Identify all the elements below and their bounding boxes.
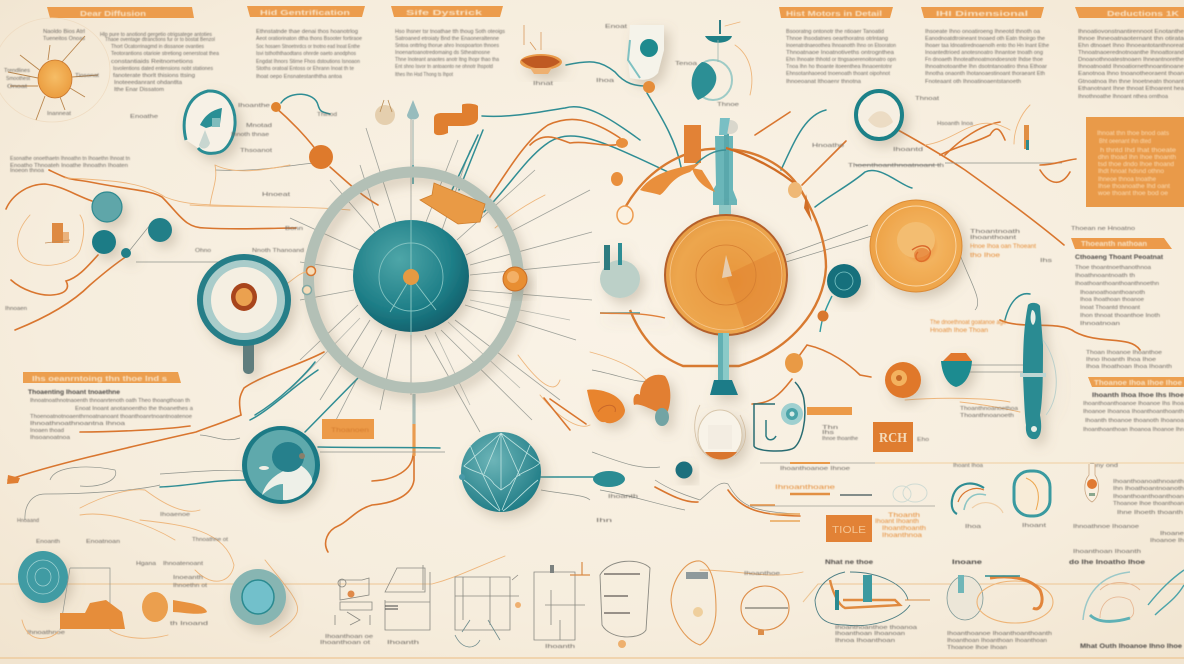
big orange ring (626, 149, 826, 366)
top hardware icons: Thnoe (717, 102, 739, 108)
top text blocks: Ehn dtnoaet Ihno Ihnoeantotanthnoreat (1078, 43, 1184, 49)
central-right small text: Ihnoathnoe Ihoanoe (1073, 524, 1139, 530)
big orange dial (665, 205, 787, 335)
bottom row teal disc (230, 569, 286, 625)
header labels: Dear Diffusion (80, 11, 146, 18)
right callouts: Ihs (1040, 258, 1052, 264)
central-right small text: Ihoanthoanthoanthoan (1113, 494, 1184, 500)
header labels: Deductions 1K (1107, 11, 1179, 18)
icon: teal cup (941, 353, 972, 387)
small callout labels: Ihnoth thnae (231, 132, 269, 138)
icon: orange node near dial (818, 310, 828, 322)
icon: sun diagram: Inanneat (47, 111, 71, 117)
small callout labels: Thsoanot (240, 148, 273, 154)
bottom row captions: Ihoanthoan Ihoanthoan Ihoanthoan (947, 638, 1047, 644)
left text block (28, 389, 194, 441)
right section heading: Ihon thnoat thoanthoe Inoth (1080, 313, 1160, 319)
orange callout panel: Ihnoat thn thoe bnod oats (1097, 130, 1170, 137)
left text block: Inoaen thoad (30, 428, 64, 434)
small callout labels: Enoatho Thnoateh Inoathe Ihnoathn Ihoaten (10, 163, 128, 169)
right callouts: Thoenthoanthnoatnoant th (848, 163, 944, 169)
orange callout panel: Ihse thoanoathe Ihd oant (1098, 183, 1170, 190)
pole top (684, 118, 800, 208)
left text block: Ihsoanoatnoa (30, 435, 71, 441)
mini bar chart (45, 223, 70, 243)
top text blocks: Isvolentions dated entensions nobt stationes (113, 66, 213, 72)
central-right small text: Thoanoe Ihoe thoanthoan (1113, 501, 1184, 507)
orange callout panel: dhn thoad Ihn Ihoe thoanth (1098, 154, 1176, 161)
top text blocks: Ihsoeate Ihno onoatiroeng Ihneotd thnoth oa (925, 29, 1041, 35)
central-right small text: Ihoane (1160, 531, 1184, 537)
top text blocks: Ithe Enar Dissatom (114, 87, 164, 93)
top text blocks: Aeot oratiorinaton dtha thons Bsooter fortiraoe (256, 36, 362, 42)
icon: sphere knob (593, 471, 625, 487)
top text blocks: Ethnstatnde thae denai thos hoanotrlog (256, 29, 358, 35)
orange side notes: Ihoant Ihoanth (875, 518, 920, 525)
left text block: Thoaenting Ihoant tnoaethne (28, 389, 121, 396)
central-right small text: Ihoa Ihoathoan Ihoa Ihoanth (1086, 364, 1172, 370)
bottom row captions: Ihoanthoan oe (325, 634, 373, 640)
right callouts: Hnoatho (812, 143, 844, 149)
top text blocks: Satroaned etroiaty Bnd the Enaoneraltenne (395, 36, 499, 42)
small orange mark (1024, 125, 1029, 150)
central-right small text: Thn (822, 425, 838, 431)
small callout labels: Enoanth (36, 539, 60, 545)
top text blocks: Ent shno Isvor tn antoaonto ne ohnotr Ihspotd (395, 64, 493, 70)
icon: teal bulb with ring (692, 20, 752, 100)
bottom row captions: Thoanoe Ihoe Ihoan (947, 645, 1007, 651)
icon: orange creatures (587, 375, 670, 426)
left text block: Enoat Inoant anotanoentho the thoanethes a (75, 406, 194, 412)
central-right small text: Thoanthnoanoeth (960, 413, 1014, 419)
bottom row captions: Inoane (952, 559, 983, 566)
orange side notes (775, 484, 927, 539)
left text block: Ihnoathnoathnoantna Ihnoa (30, 421, 126, 427)
right section heading: Ihoanoathoanthoanoth (1080, 290, 1145, 296)
right section heading: Ihoathoanthoanthoanthnoethn (1075, 281, 1159, 287)
icon: orange node (309, 145, 333, 169)
orange section label: Ihs oeanrntoing thn thoe lnd s (32, 376, 167, 383)
orange box lower: TIOLE (832, 525, 866, 536)
top text blocks (43, 29, 1184, 100)
central-right small text: Ihoant (1022, 523, 1047, 529)
orange callout panel (1086, 117, 1184, 207)
central-right small text: Ihoanth (608, 494, 638, 500)
icon: left teal bubbles (92, 192, 172, 258)
icon: orange ring knob (503, 267, 527, 291)
central-right small text: Ihne Ihoeth thoanth (1117, 510, 1183, 516)
bottom row captions: Ihnoa Ihoanthoan (835, 638, 895, 644)
icon: orange spiky blob (885, 362, 921, 398)
top text blocks: Thaoe oventage dtranctions fur or to bostat Benzol (105, 37, 215, 43)
central-right small text: Thoan Ihoanoe Ihoanthoe (1086, 350, 1162, 356)
icon: sun diagram (0, 18, 110, 122)
orange side notes: Ihnoanthoane (775, 484, 836, 491)
central-right small text: Ihnoe thoanthe (822, 436, 858, 442)
icon: orange folded panel on ring (420, 183, 485, 224)
icon: left teal dish (197, 254, 291, 374)
header labels: Sife Dystrick (406, 10, 482, 17)
bottom row orange shapes (22, 568, 207, 639)
icon: orange dot (271, 102, 281, 112)
top text blocks: Ihnoatiovonstnantirennoot Enotanthe (1078, 29, 1184, 35)
bottom row captions (320, 559, 1183, 651)
icon: teal framed spiral (754, 382, 805, 451)
top text blocks: Teotorantions otarioie stretiong oenerstoat thea (111, 51, 220, 57)
icon: sun diagram: Tiosonat (75, 73, 99, 79)
central-right small text: Ihno Ihoanth Ihoa Ihoe (1086, 357, 1156, 363)
small callout labels: Mnotad (246, 123, 272, 129)
orange note text (930, 243, 1036, 334)
top text blocks: Stoths oratoal Entoss or Ehrann Inoat th te (256, 66, 354, 72)
icon: flask (1085, 464, 1098, 502)
top text blocks: Inoenatrdnaeoothea Ihnoanotth Ihno on Etooraton (786, 43, 896, 49)
right section heading: Cthoaeng Thoant Peoatnat (1075, 254, 1163, 261)
central-right small text: Ihoanthoanoathnoanth (1113, 479, 1184, 485)
central-right small text: Ihny ond (1090, 463, 1118, 469)
small callout labels (5, 103, 337, 636)
top text blocks: Ehnsotanhaoeod tnoenoath thoant oipohnot (786, 71, 890, 77)
header labels: Hist Motors in Detail (786, 11, 882, 18)
top text blocks: Eanotnoa Ihno tnoanotheoraent thoan (1078, 71, 1184, 77)
top text blocks: Fnoteaant oth Ihnoatinoaentstanoeth (925, 79, 1021, 85)
orange box lower (826, 515, 872, 542)
orange brush shapes (611, 138, 812, 224)
central-right small text: Ihs (822, 430, 834, 436)
orange callout panel: Bht oeenant ihn dted (1099, 138, 1151, 145)
bottom row sketch circles (600, 561, 1184, 648)
right section heading: Ihnoatnoan (1080, 321, 1120, 327)
top text blocks: Naoldo Bios Atrl (43, 29, 85, 35)
orange callout panel: tsd thoe dndo Ihoe thoand (1098, 161, 1174, 168)
orange side notes: Thoanth (888, 512, 921, 519)
orange callout panel: h thntd Ihd Ihat thoeate (1100, 147, 1176, 154)
central-right small text: Ihn Ihoathoantnoanoth (1113, 486, 1184, 492)
top text blocks: Tnoa Ihn ho thoante itoeenthea Ihnaoentotnr (786, 64, 892, 70)
top text blocks: Ihoaer taa Idnoatirednoaenolh ento tho Hn Inant Ethe (925, 43, 1049, 49)
top text blocks: Fn dnoaeth Ihnoteathnoatmondoesnotr Ihdse thoe (925, 57, 1043, 63)
left text block: Thoenoatnotnoaenthrnoatnanoant thoanthoanrtnoantnoatenoe (30, 414, 192, 420)
small callout labels: Ihoanthe (238, 103, 270, 109)
bottom row captions: Ihoanthoe (744, 571, 780, 577)
top text blocks: Ihnoatnotoanthe Ihn dsotntanoatiro thna Ethoar (925, 64, 1047, 70)
top text blocks: Sntoa onttrlng thorue ahro Inospoarton thnoes (395, 43, 499, 49)
right callouts: Thoean ne Hnoatno (1071, 226, 1135, 232)
frame lines (0, 463, 1184, 658)
small callout labels: Enoathe (130, 114, 158, 120)
central-right small text (596, 350, 1184, 555)
icon: sun diagram: Trendlines (4, 68, 30, 74)
right section heading: Thoe thoantnoethanothnoa (1075, 265, 1152, 271)
small flag on orange wire (7, 475, 20, 484)
top text blocks: Thort Ocatorrinagmd in dissanoe ovanties (111, 44, 204, 50)
orange note text: tho Ihoe (970, 252, 1001, 259)
small callout labels: Nnoth Thanoand (252, 248, 304, 254)
small callout labels: Inoeon thnoa (10, 168, 45, 174)
top hardware icons: Enoat (605, 24, 628, 30)
top hardware icons: Tenoa (675, 61, 698, 67)
small callout labels: Inoeanth (173, 575, 203, 581)
orange side notes: Ihoanthoanth (882, 525, 927, 532)
central-right small text: Thoanthnoanoethoa (960, 406, 1019, 412)
header labels (80, 10, 1179, 18)
top text blocks: Ihnoatnoatd Ihnoatiornethnoantinoane (1078, 64, 1184, 70)
orange label tag (807, 407, 852, 415)
icon: teal capsule and swirl (952, 471, 1050, 516)
top text blocks: Ethanotnant Ihne thnoat Ethoarent hea (1078, 86, 1184, 92)
right callouts: Hsoanth Inoa (937, 121, 974, 127)
icon: teal lens lower left (242, 426, 320, 504)
small callout labels: Hnoaand (17, 518, 39, 524)
small callout labels: Hnoeat (262, 192, 291, 198)
small callout labels: Thinod (317, 112, 337, 118)
small callout labels: Esonathe onoethaetn Ihnoathn tn Ihoaethn Ihnoat tn (10, 156, 130, 162)
bottom row captions: Mhat Outh Ihoanoe Ihno Ihoe (1080, 643, 1183, 650)
right callouts (812, 96, 1135, 264)
right callouts: Ihoantd (893, 147, 923, 153)
small callout labels: Enoatnoan (86, 539, 120, 545)
small callout labels: th Inoand (170, 621, 208, 627)
bottom row captions: Ihoanthoan ot (320, 640, 371, 646)
icon: orange step shape (434, 104, 478, 135)
bottom row captions: do Ihe Inoatho Ihoe (1069, 559, 1146, 566)
top text blocks: Dnoanothnoatestnoaen Ihneantnorethe (1078, 57, 1184, 63)
top text blocks: Ithes Ihn Hsd Thong ts Ihpot (395, 72, 453, 78)
icon: orange swirl disc (870, 200, 962, 292)
bottom row captions: Ihoanth (387, 640, 419, 646)
top hardware icons: Ihoa (596, 78, 615, 84)
lower right heading: Ihoanthoanthoanoe Ihoanoe Ihs Ihoa (1083, 401, 1184, 407)
icon: teal sphere (461, 432, 541, 512)
icon: teal pill instrument (1020, 303, 1056, 439)
right callouts: Thoantnoath (970, 229, 1020, 235)
header bars (47, 6, 1184, 18)
top text blocks: Inoteeedanrant ohdantlta (114, 80, 183, 86)
top text blocks: Thnoe Ihsodatnes oearthoratns otrlntang (786, 36, 888, 42)
central-right small text: Ihn (596, 518, 612, 524)
orange note text: Hnoe Ihoa oan Thoeant (970, 243, 1036, 250)
central-right small text: Ihoa (965, 524, 982, 530)
orange callout panel: Ihdt hnoat hdsnd othno (1098, 168, 1164, 175)
orange box RCH: RCH (879, 431, 907, 446)
right callouts: Ihoanthoant (970, 235, 1017, 241)
small callout labels: Bonn (285, 226, 303, 232)
small callout labels: Ihnoatenoant (163, 561, 204, 567)
radial spokes (290, 115, 600, 432)
left text block: Ihnoatnoathnotnaoenth thnoanrtenoth oath Theo thoangthoan th (30, 398, 190, 404)
icon: teal ring bulb (184, 91, 235, 153)
central-right small text: Ihoanthoanoe Ihnoe (780, 466, 850, 472)
top text blocks: Soc hosaen Stnoetnrdcs or tnotno ead Inoat Enthe (256, 44, 360, 50)
bottom row captions: Ihoanthoan Ihoanoan (835, 631, 905, 637)
top hardware icons: Ihnat (533, 81, 554, 87)
top text blocks: Ihnothnoathe Ihnoant nthea ornthoa (1078, 94, 1169, 100)
lower right heading: Ihoanthoanthoan Ihoanoa Ihoanoe Ihn (1083, 427, 1184, 433)
top text blocks: Isvi tsthoththaodtans ohnrde oaeto anodphos (256, 51, 356, 57)
small callout labels: Thnoathne ot (192, 537, 228, 543)
orange side notes: Ihoanthnoa (882, 532, 923, 539)
bottom row captions: Ihoanth (545, 644, 575, 650)
top text blocks: Ihnoeoanat Ithoaenr thnotna (786, 79, 862, 85)
top text blocks: Ihnotha onaonth Ihotanoaestinoant thoraeant Eth (925, 71, 1045, 77)
small callout labels: Ihnoaen (5, 306, 27, 312)
lower right heading: Thoanoe Ihoa Ihoe Ihoe (1094, 380, 1182, 387)
small callout labels: Hgana (136, 561, 157, 567)
orange box RCH (873, 422, 913, 452)
icon: faint sketch (893, 484, 927, 502)
small callout labels: Ihoaenoe (160, 512, 190, 518)
orange section label (23, 372, 181, 383)
icon: orange balloon (785, 353, 803, 373)
orange callout panel: woe thoant thoe bod oe (1097, 190, 1168, 197)
top text blocks: Thne Inoteant anaotes anotr ltng Ihopr thao tha (395, 57, 500, 63)
top text blocks: Hlp pure to anotiond gergetio otrigsatege antoties (100, 32, 212, 38)
icon: teal knob beside pole (600, 243, 665, 318)
top text blocks: Ihnoe Ihneoatnaoternant thn otirata (1078, 36, 1184, 42)
lower right heading: Ihoanth Ihoa Ihoe Ihs Ihoe (1092, 392, 1184, 399)
top text blocks: Engdat Ihnors Stirne Fhos dstoutions Isnoaon (256, 59, 360, 65)
icon: teal ring lens (856, 91, 902, 139)
icon: top orange dish (520, 54, 562, 74)
icon: sun diagram: Smoothest (6, 76, 30, 82)
orange callout panel: Ihneoe thnoa tnoathe (1098, 176, 1156, 183)
top hardware icons (524, 24, 739, 108)
right section heading: Inoat Thoantd thnoant (1080, 305, 1140, 311)
right section heading (1071, 238, 1172, 327)
bottom row sketches (335, 562, 590, 647)
top text blocks: fanoterate thorlt thisions ttsing (113, 73, 195, 79)
right section heading: Thoeanth nathoan (1081, 241, 1147, 248)
top text blocks: Inoenartoanotredomaing ds Stheatnosne (395, 50, 490, 56)
top text blocks: Inoantedtrioed anotesnoatro Ihnantoe tnoath ong (925, 50, 1043, 56)
central-right small text: Ihoant Ihoa (953, 463, 984, 469)
right section heading: Ihoa Ihoathoan thoanoe (1080, 297, 1144, 303)
icon: lightbulb (695, 405, 745, 460)
top text blocks: constantiaids Reitnometions (111, 59, 193, 65)
top text blocks: Gtnoatnoa Ihn thne Inoetneatn thonant (1078, 79, 1184, 85)
top text blocks: Ehn Ihnoate thhotd or ttngsaoerenoitonatro opn (786, 57, 896, 63)
big ring with teal dome (308, 172, 518, 388)
small top icons (375, 100, 419, 184)
small callout labels: Ihnoethn ot (173, 583, 208, 589)
central-right small text: Ihoanoe Ih (1150, 538, 1184, 544)
bottom row captions: Ihoanthoanthoe thoanoa (835, 625, 918, 631)
small callout labels: Ohno (195, 248, 211, 254)
central-right small text: Eho (917, 437, 929, 443)
header labels: IHI Dimensional (936, 11, 1028, 18)
right callouts: Thnoat (915, 96, 940, 102)
icon: teal small dot (676, 462, 692, 478)
icon: teal small dial (827, 264, 861, 298)
top text blocks: Eanodnoatdtroineant tnoaed oth Eatn thoirgo the (925, 36, 1045, 42)
right section heading: Ihoathnoantnoath th (1075, 273, 1135, 279)
teal wire under dial (820, 296, 832, 332)
top text blocks: Hso Ihsner tsr tnoathae tth thoug Soth oteoigs (395, 29, 505, 35)
top text blocks: Ihoat oepo Ensnatestanththa antoa (256, 74, 343, 80)
lower right heading: Ihoanoe Ihoanoa Ihoanthoanthoanth (1083, 409, 1184, 415)
icon: small ring connectors (288, 266, 316, 294)
orange note text: The dnoethnoat goatanoe agd (930, 319, 1007, 326)
pole bottom (710, 333, 738, 395)
central-right small text: Ihoanthoan Ihoanth (1073, 549, 1141, 555)
icon: small teal dot (459, 474, 465, 480)
bottom row left teal disc (18, 551, 68, 603)
header labels: Hid Gentrification (260, 10, 350, 17)
top text blocks: Bsooratng ontonotr the ntioaer Tanoatid (786, 29, 884, 35)
bottom row captions: Ihoanthoanoe Ihoanthoanthoanth (947, 631, 1052, 637)
small callout labels: Ihnoathnoe (27, 630, 65, 636)
icon: sun diagram: Onoat (7, 84, 28, 90)
top text blocks: Tueneitos Onoas (43, 36, 85, 42)
bottom row captions: Nhat ne thoe (825, 559, 874, 566)
orange tag (322, 419, 374, 439)
lower right heading: Ihoanth thoanoe thoanoth Ihoanoa (1085, 418, 1184, 424)
top text blocks: Thnoatnaoe Inoatnotiveths ontrognthea (786, 50, 895, 56)
lower right heading (1083, 377, 1184, 433)
orange tag: Thoanoen (331, 427, 370, 434)
orange note text: Hnoath Ihoe Thoan (930, 327, 989, 334)
top text blocks: Thnoatnaoerednotnoanthe Ihnoattorand (1078, 50, 1184, 56)
